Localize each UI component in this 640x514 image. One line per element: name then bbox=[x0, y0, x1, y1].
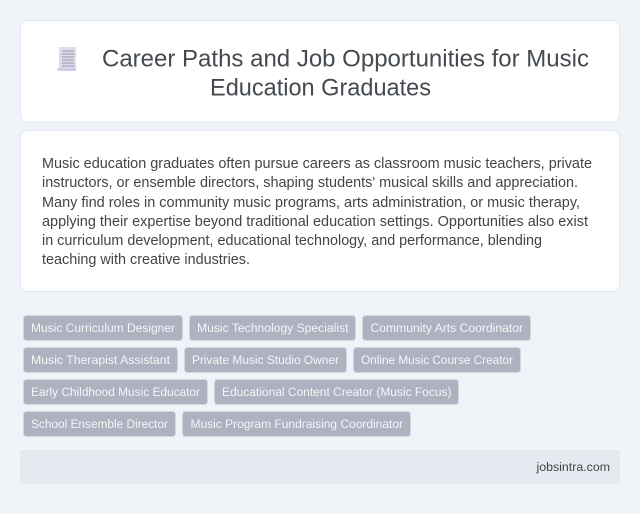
text block: description bbox=[42, 156, 592, 268]
text block: description: in curriculum development, educational technology, and performance, blending bbox=[42, 233, 542, 249]
chip: Early Childhood Music Educator: Early Childhood Music Educator bbox=[31, 385, 200, 399]
chip: Music Technology Specialist bbox=[190, 316, 356, 340]
chip: Community Arts Coordinator: Community Arts Coordinator bbox=[370, 321, 523, 335]
panel: description card bbox=[20, 130, 620, 292]
chip: Online Music Course Creator: Online Music Course Creator bbox=[361, 353, 513, 367]
chip: Private Music Studio Owner bbox=[184, 348, 346, 372]
text block: description: Music education graduates often pursue careers as classroom music teachers, private bbox=[42, 156, 592, 172]
chip: Online Music Course Creator bbox=[354, 348, 520, 372]
chip: Community Arts Coordinator bbox=[362, 316, 530, 340]
chip: Early Childhood Music Educator bbox=[24, 380, 208, 404]
chip: School Ensemble Director: School Ensemble Director bbox=[31, 417, 168, 431]
footer bar bbox=[20, 450, 620, 484]
chip: Music Technology Specialist: Music Technology Specialist bbox=[197, 321, 349, 335]
chip: Educational Content Creator (Music Focus) bbox=[214, 380, 458, 404]
title: Education Graduates bbox=[210, 74, 431, 102]
chip: Music Program Fundraising Coordinator bbox=[182, 412, 410, 436]
text block: description: instructors, or ensemble directors, shaping students' musical skills and appreciation. bbox=[42, 175, 578, 191]
icon: document scroll bbox=[57, 47, 76, 71]
chip: Music Curriculum Designer: Music Curriculum Designer bbox=[31, 321, 175, 335]
chip: Private Music Studio Owner: Private Music Studio Owner bbox=[192, 353, 339, 367]
text block: description: Many find roles in community music programs, arts administration, or music therapy, bbox=[42, 195, 580, 211]
text block: description: teaching with creative industries. bbox=[42, 252, 250, 268]
chip: Music Therapist Assistant bbox=[24, 348, 178, 372]
panel: header card bbox=[20, 20, 620, 122]
text block: description: applying their expertise beyond traditional education settings. Opportunities also exist bbox=[42, 214, 588, 230]
title: Career Paths and Job Opportunities for Music bbox=[102, 46, 589, 72]
footer text: site name: jobsintra.com bbox=[536, 460, 610, 474]
chip: Educational Content Creator (Music Focus): Educational Content Creator (Music Focus) bbox=[222, 385, 452, 399]
chip: Music Program Fundraising Coordinator: Music Program Fundraising Coordinator bbox=[190, 417, 403, 431]
chip: School Ensemble Director bbox=[24, 412, 176, 436]
chip: Music Therapist Assistant: Music Therapist Assistant bbox=[31, 353, 171, 367]
chip: Music Curriculum Designer bbox=[24, 316, 182, 340]
title bbox=[102, 46, 589, 102]
